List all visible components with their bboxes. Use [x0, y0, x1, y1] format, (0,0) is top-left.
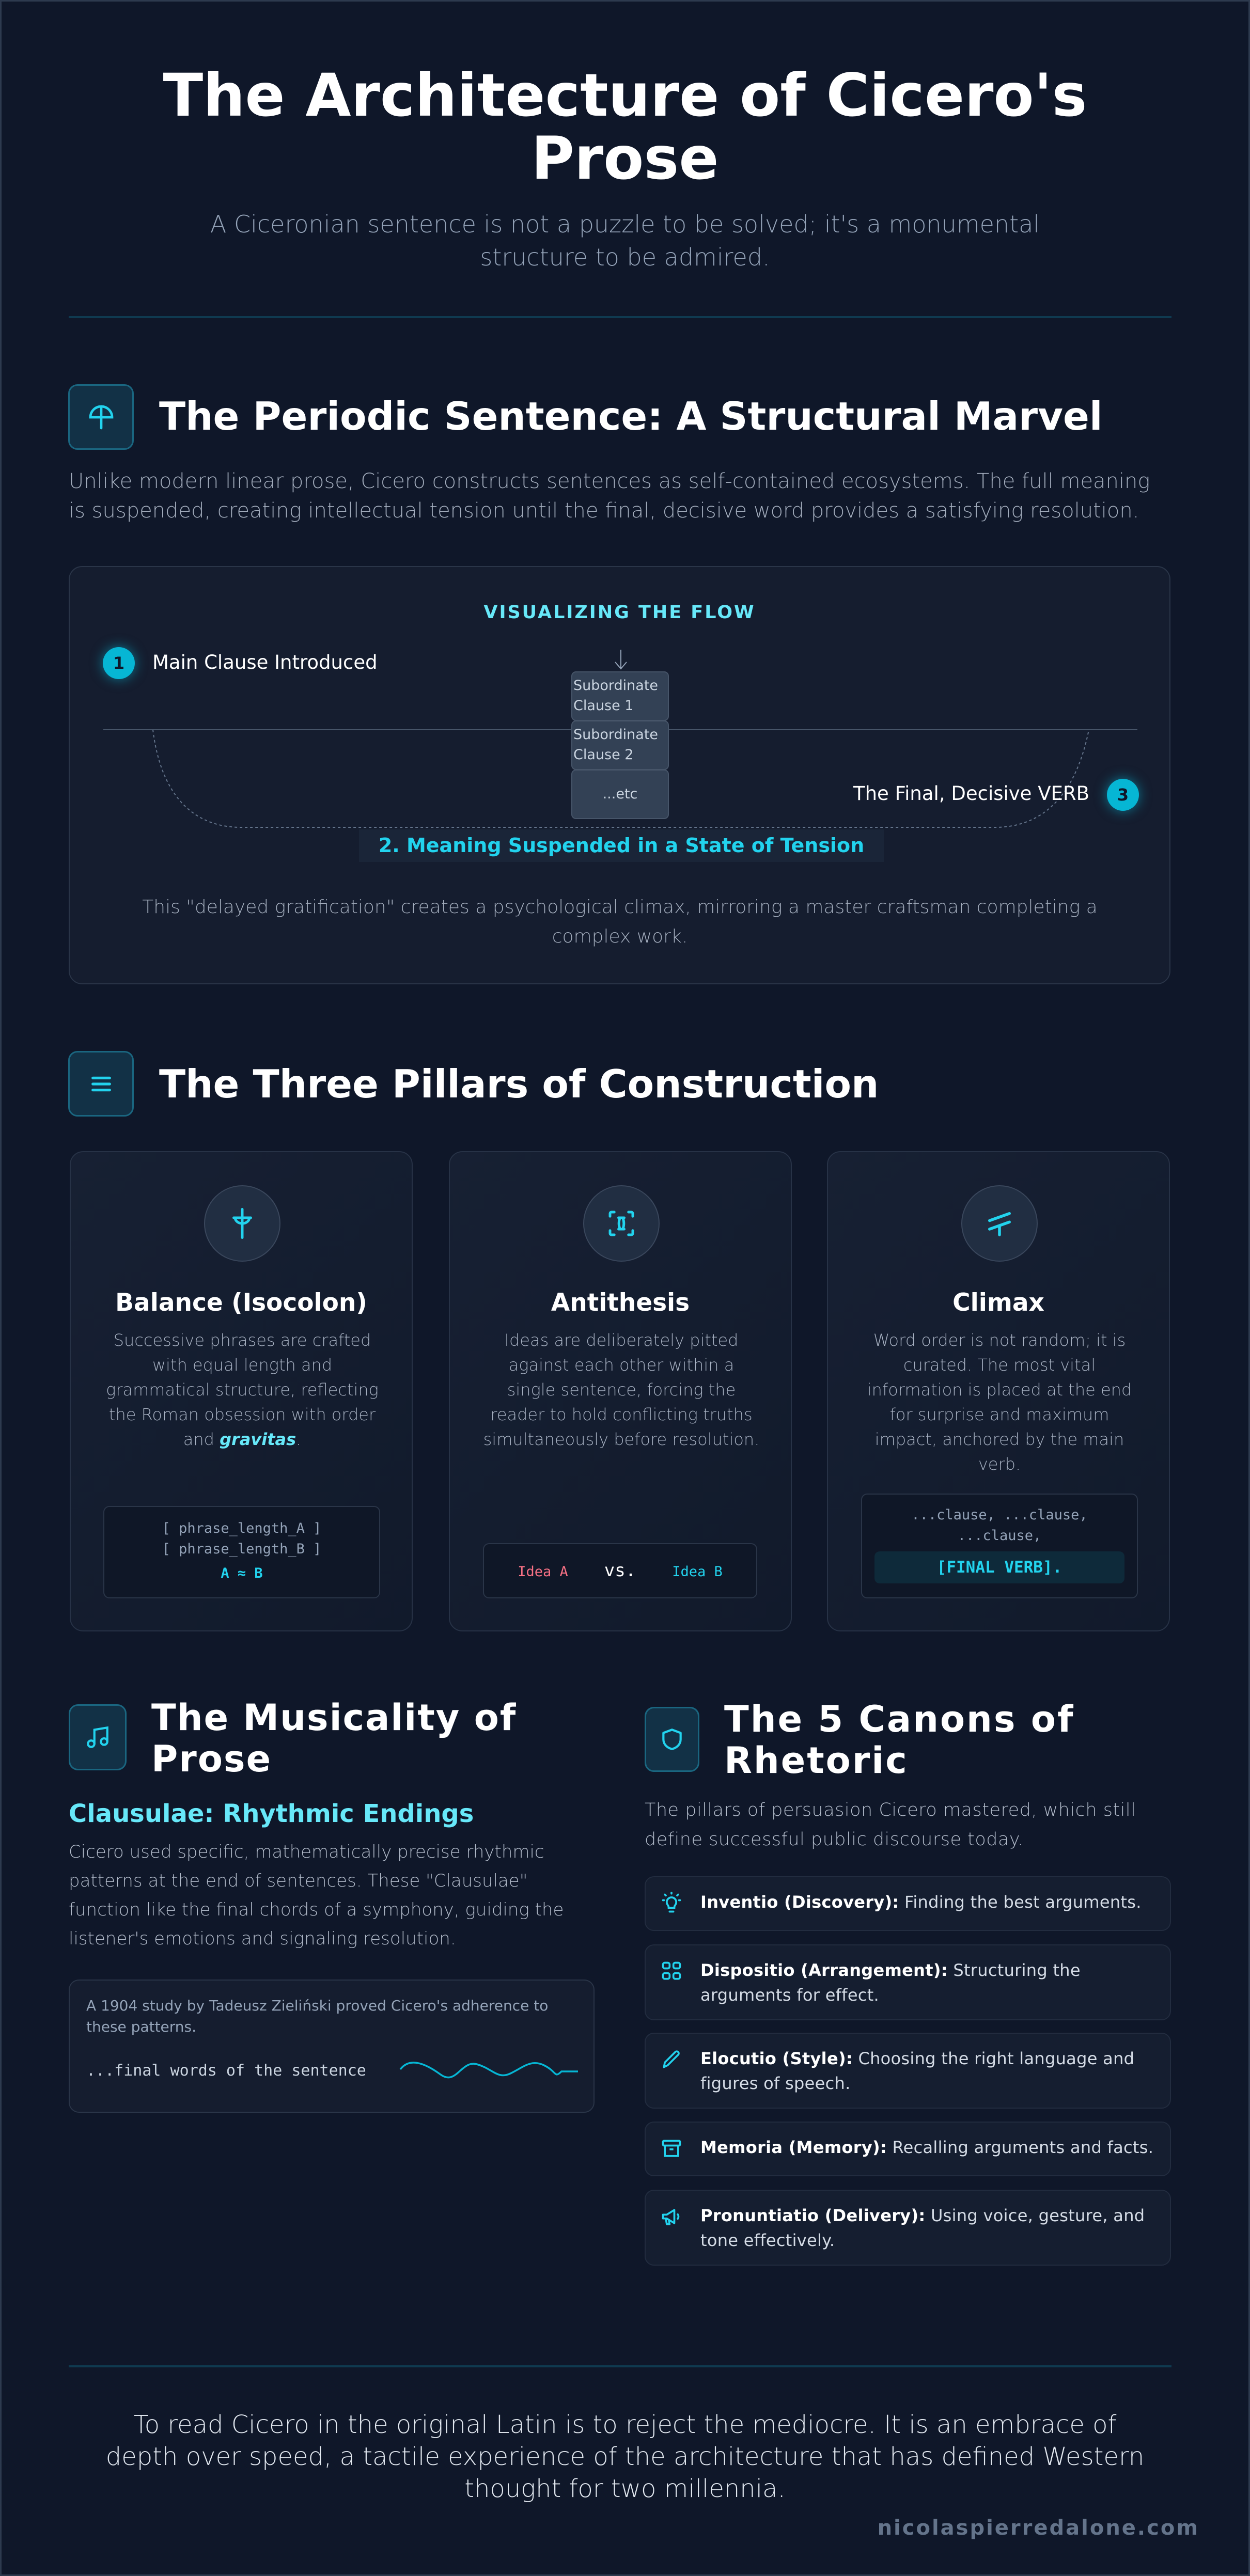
description: information is placed at the end	[867, 1380, 1132, 1400]
heading: Rhetoric	[724, 1739, 909, 1782]
canon: memoria	[645, 2122, 1171, 2176]
title: Prose	[531, 124, 719, 193]
footer quote: To read Cicero in the original Latin is to reject the mediocre. It is an embrace of depth over speed, a tactile experience of the architecture that has defined Western thought for two millennia.	[106, 2410, 1144, 2503]
subheading: Clausulae: Rhythmic Endings	[69, 1799, 474, 1828]
canon: dispositio	[645, 1944, 1171, 2020]
description: single sentence, forcing the	[507, 1380, 736, 1400]
description: impact, anchored by the main	[875, 1430, 1124, 1449]
description	[483, 1330, 759, 1449]
clause stack	[571, 671, 669, 819]
canon: memoria: Memoria (Memory): Recalling arguments and facts.	[700, 2138, 1153, 2157]
code box: idea A vs idea B: Idea A vs. Idea B	[518, 1560, 723, 1581]
step 3: 3	[1117, 785, 1129, 805]
code box	[861, 1494, 1138, 1598]
caption: This "delayed gratification" creates a psychological climax, mirroring a master craftsman completing a complex work.	[142, 897, 1098, 947]
heading: The Musicality of	[151, 1697, 517, 1739]
step 2 label	[359, 829, 884, 862]
description	[867, 1330, 1132, 1474]
description: reader to hold conflicting truths	[490, 1405, 753, 1424]
icon: archive	[662, 2140, 681, 2157]
description: grammatical structure, reflecting	[106, 1380, 379, 1400]
heading: The Three Pillars of Construction	[159, 1061, 879, 1107]
step 1: Main Clause Introduced	[152, 651, 378, 673]
title: Climax	[952, 1289, 1044, 1317]
icon: grid	[662, 1961, 681, 1980]
watermark: nicolaspierredalone.com	[878, 2516, 1199, 2540]
card: climax	[827, 1151, 1170, 1631]
title: The Architecture of Cicero's	[163, 61, 1087, 130]
icon: shield	[645, 1707, 699, 1772]
section header: periodic sentence	[68, 384, 1103, 450]
icon: menu lines	[68, 1051, 134, 1117]
step 2 label: 2. Meaning Suspended in a State of Tension	[379, 834, 864, 857]
icon: pencil	[663, 2050, 680, 2068]
clause stack: Clause 2	[573, 747, 633, 763]
canon: elocutio	[645, 2033, 1171, 2109]
paragraph: Cicero used specific, mathematically precise rhythmic patterns at the end of sentences. These "Clausulae" function like the final chords of a symphony, guiding the listener's emotions and signaling resolution.	[69, 1842, 564, 1949]
step 3	[853, 772, 1146, 818]
code box: ...clause, ...clause,	[911, 1507, 1088, 1523]
code box: [ phrase_length_B ]	[162, 1541, 321, 1557]
clause stack: ...etc	[603, 786, 637, 802]
description: Ideas are deliberately pitted	[505, 1330, 738, 1350]
subtitle: A Ciceronian sentence is not a puzzle to be solved; it's a monumental structure to be admired.	[210, 210, 1040, 271]
card: antithesis	[449, 1151, 792, 1631]
callout box: A 1904 study by Tadeusz Zieliński proved Cicero's adherence to these patterns.	[86, 1997, 548, 2035]
card: balance	[70, 1151, 413, 1631]
icon: music note	[69, 1704, 127, 1770]
description: with equal length and	[152, 1355, 332, 1375]
code box: idea A vs idea B	[483, 1543, 757, 1598]
canon: dispositio: Dispositio (Arrangement): Structuring the arguments for effect.	[700, 1960, 1081, 2005]
description: Word order is not random; it is	[873, 1330, 1126, 1350]
description: curated. The most vital	[903, 1355, 1096, 1375]
title: Balance (Isocolon)	[115, 1289, 367, 1317]
canon: inventio: Inventio (Discovery): Finding the best arguments.	[700, 1892, 1142, 1912]
callout box	[69, 1980, 595, 2113]
icon: rising lines	[961, 1185, 1038, 1262]
code box: ...clause,	[958, 1528, 1041, 1544]
diagram	[103, 650, 1137, 828]
description: and gravitas.	[183, 1430, 301, 1449]
code box	[103, 1506, 380, 1598]
clause stack: Subordinate	[573, 678, 658, 694]
icon: umbrella	[68, 384, 134, 450]
step 1	[96, 640, 378, 686]
description	[106, 1330, 379, 1449]
clause stack: Subordinate	[573, 727, 658, 743]
code box: [FINAL VERB].	[937, 1558, 1062, 1577]
step 3: The Final, Decisive VERB	[853, 782, 1089, 805]
section: five canons	[645, 1698, 1074, 1782]
icon: brackets	[583, 1185, 660, 1262]
description: Successive phrases are crafted	[114, 1330, 371, 1350]
title: Antithesis	[551, 1289, 690, 1317]
heading: Prose	[151, 1738, 272, 1780]
canon: inventio	[645, 1876, 1171, 1931]
heading	[724, 1698, 1074, 1782]
canons intro: The pillars of persuasion Cicero mastered, which still define successful public discourse today.	[645, 1800, 1136, 1850]
canon: pronuntiatio: Pronuntiatio (Delivery): Using voice, gesture, and tone effectively.	[700, 2206, 1145, 2250]
heading: The 5 Canons of	[724, 1698, 1074, 1740]
code box: [ phrase_length_A ]	[162, 1520, 321, 1536]
canon: elocutio: Elocutio (Style): Choosing the right language and figures of speech.	[700, 2049, 1134, 2093]
section: musicality	[69, 1697, 595, 2113]
icon: megaphone	[662, 2209, 680, 2225]
panel: visualizing the flow	[69, 566, 1170, 984]
clause stack: Clause 1	[573, 698, 633, 714]
title	[163, 61, 1087, 193]
panel heading: VISUALIZING THE FLOW	[483, 602, 756, 623]
icon: balance	[204, 1185, 280, 1262]
heading	[151, 1697, 517, 1780]
description: simultaneously before resolution.	[483, 1430, 759, 1449]
section header: three pillars	[68, 1051, 879, 1117]
code box: A ≈ B	[221, 1565, 263, 1581]
heading: The Periodic Sentence: A Structural Marvel	[159, 394, 1103, 439]
description: for surprise and maximum	[890, 1405, 1109, 1424]
icon: wave	[400, 2062, 578, 2078]
canon: pronuntiatio	[645, 2190, 1171, 2266]
description: the Roman obsession with order	[109, 1405, 376, 1424]
step 1: 1	[113, 653, 124, 673]
callout box: ...final words of the sentence	[86, 2062, 366, 2080]
intro paragraph: Unlike modern linear prose, Cicero constructs sentences as self-contained ecosystems. The full meaning is suspended, creating intellectual tension until the final, decisive word provides a satisfying resolution.	[69, 469, 1150, 523]
description: against each other within a	[509, 1355, 734, 1375]
icon: bulb	[662, 1892, 681, 1913]
description: verb.	[978, 1454, 1021, 1474]
